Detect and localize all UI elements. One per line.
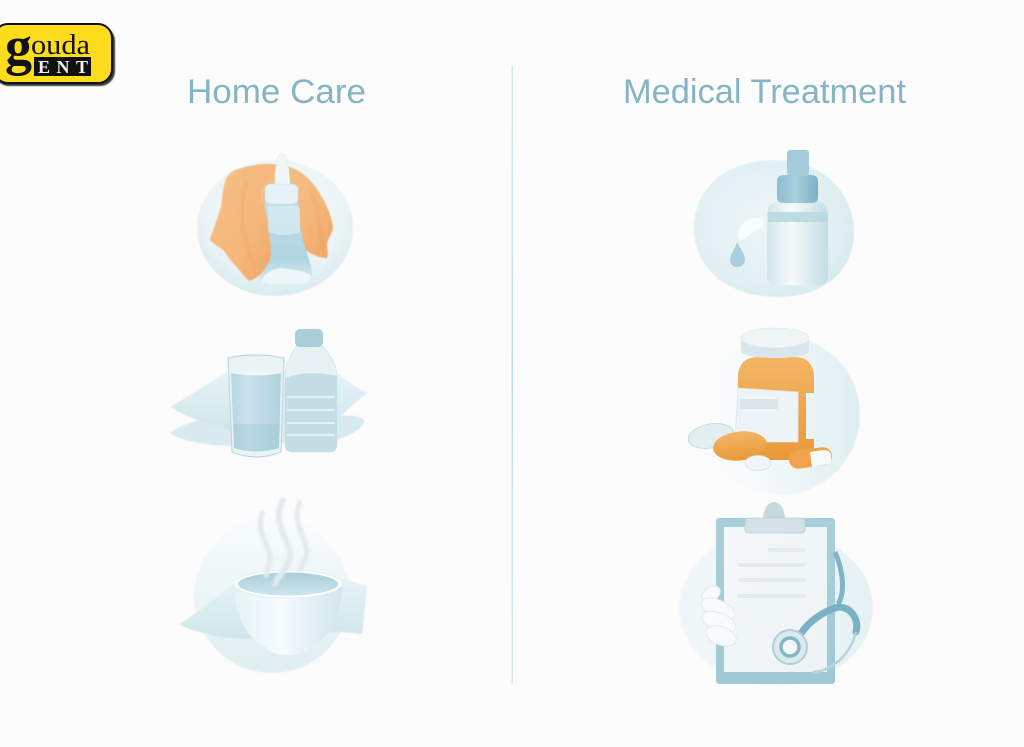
icon: water glass, bottle and pillows bbox=[170, 329, 368, 457]
bottle body bbox=[767, 200, 828, 285]
orange bottle bbox=[737, 357, 814, 460]
clipboard board bbox=[716, 518, 835, 684]
column divider bbox=[512, 66, 513, 684]
cream dab bbox=[738, 218, 763, 240]
hand bbox=[698, 583, 739, 650]
logo: Gouda ENT: ENT bbox=[38, 57, 88, 77]
heading: Medical Treatment: Medical Treatment bbox=[623, 73, 907, 111]
text lines bbox=[737, 548, 805, 598]
towel back bbox=[262, 165, 333, 258]
label bbox=[735, 388, 814, 442]
logo: Gouda ENT: ouda bbox=[31, 30, 91, 61]
logo: Gouda ENT: g bbox=[5, 16, 32, 76]
pillow bbox=[179, 575, 367, 639]
white cap bbox=[741, 328, 809, 358]
bottle bbox=[258, 153, 312, 284]
towel front bbox=[210, 164, 276, 280]
pills bbox=[686, 420, 833, 470]
icon: nasal spray bottle with drop bbox=[694, 150, 854, 297]
clip bbox=[745, 502, 805, 533]
steam bbox=[260, 500, 307, 584]
water drop bbox=[730, 242, 745, 267]
icon: towel and baby bottle bbox=[197, 153, 353, 296]
icon: pill bottle and pills bbox=[686, 328, 860, 495]
water bottle bbox=[285, 329, 337, 452]
spray cap bbox=[777, 150, 818, 203]
icon: steaming bowl and pillow bbox=[179, 500, 367, 673]
bottle band bbox=[768, 212, 828, 222]
heading: Home Care: Home Care bbox=[187, 73, 366, 111]
bowl bbox=[234, 570, 342, 655]
pillows bbox=[170, 370, 368, 446]
logo: Gouda ENT bbox=[0, 16, 115, 86]
paper bbox=[724, 527, 827, 672]
glass of water bbox=[228, 355, 284, 457]
icon: clipboard, hand and stethoscope bbox=[679, 502, 873, 686]
stethoscope bbox=[773, 552, 857, 672]
